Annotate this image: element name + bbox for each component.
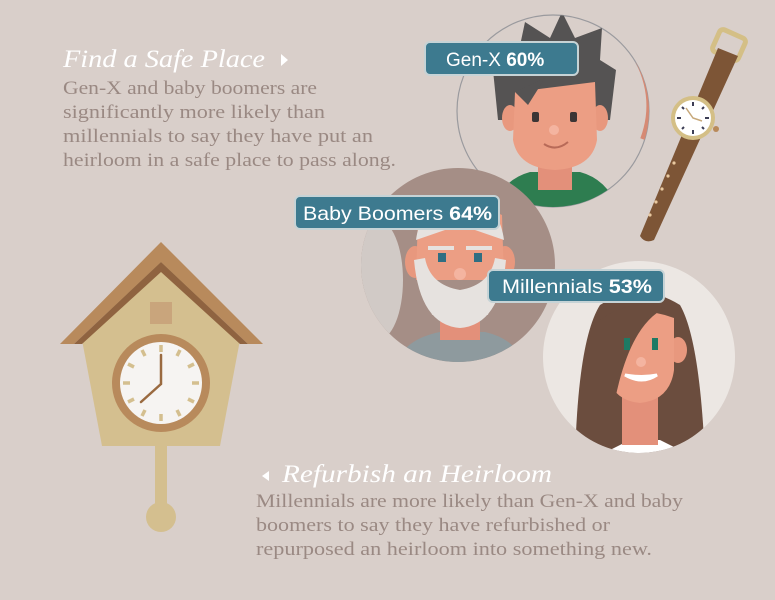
text block: safe place: Gen-X and baby boomers are — [63, 79, 317, 99]
label: gen-x 60%: Gen-X 60% — [446, 50, 544, 71]
text block: refurbish — [256, 492, 684, 560]
portrait: baby boomer — [353, 168, 555, 370]
text block: refurbish: repurposed an heirloom into something new. — [256, 540, 652, 560]
heading: refurbish an heirloom: Refurbish an Heirloom — [281, 461, 552, 488]
text block: safe place — [63, 79, 396, 171]
label: baby boomers 64% — [295, 196, 499, 229]
text block: safe place: significantly more likely than — [63, 103, 325, 123]
icon: wristwatch — [640, 28, 747, 241]
label: baby boomers 64%: Baby Boomers 64% — [303, 204, 492, 225]
text block: refurbish: boomers to say they have refurbished or — [256, 516, 610, 536]
text block: safe place: millennials to say they have put an — [63, 127, 373, 147]
label: millennials 53% — [488, 270, 664, 302]
label: millennials 53%: Millennials 53% — [502, 277, 652, 298]
icon: cuckoo clock — [60, 242, 263, 532]
text block: refurbish: Millennials are more likely than Gen-X and baby — [256, 492, 684, 512]
text block: safe place: heirloom in a safe place to pass along. — [63, 151, 396, 171]
label: gen-x 60% — [425, 42, 578, 75]
portrait: millennial — [543, 261, 735, 460]
heading: find a safe place: Find a Safe Place — [62, 46, 265, 73]
portrait: gen-x — [456, 14, 650, 208]
